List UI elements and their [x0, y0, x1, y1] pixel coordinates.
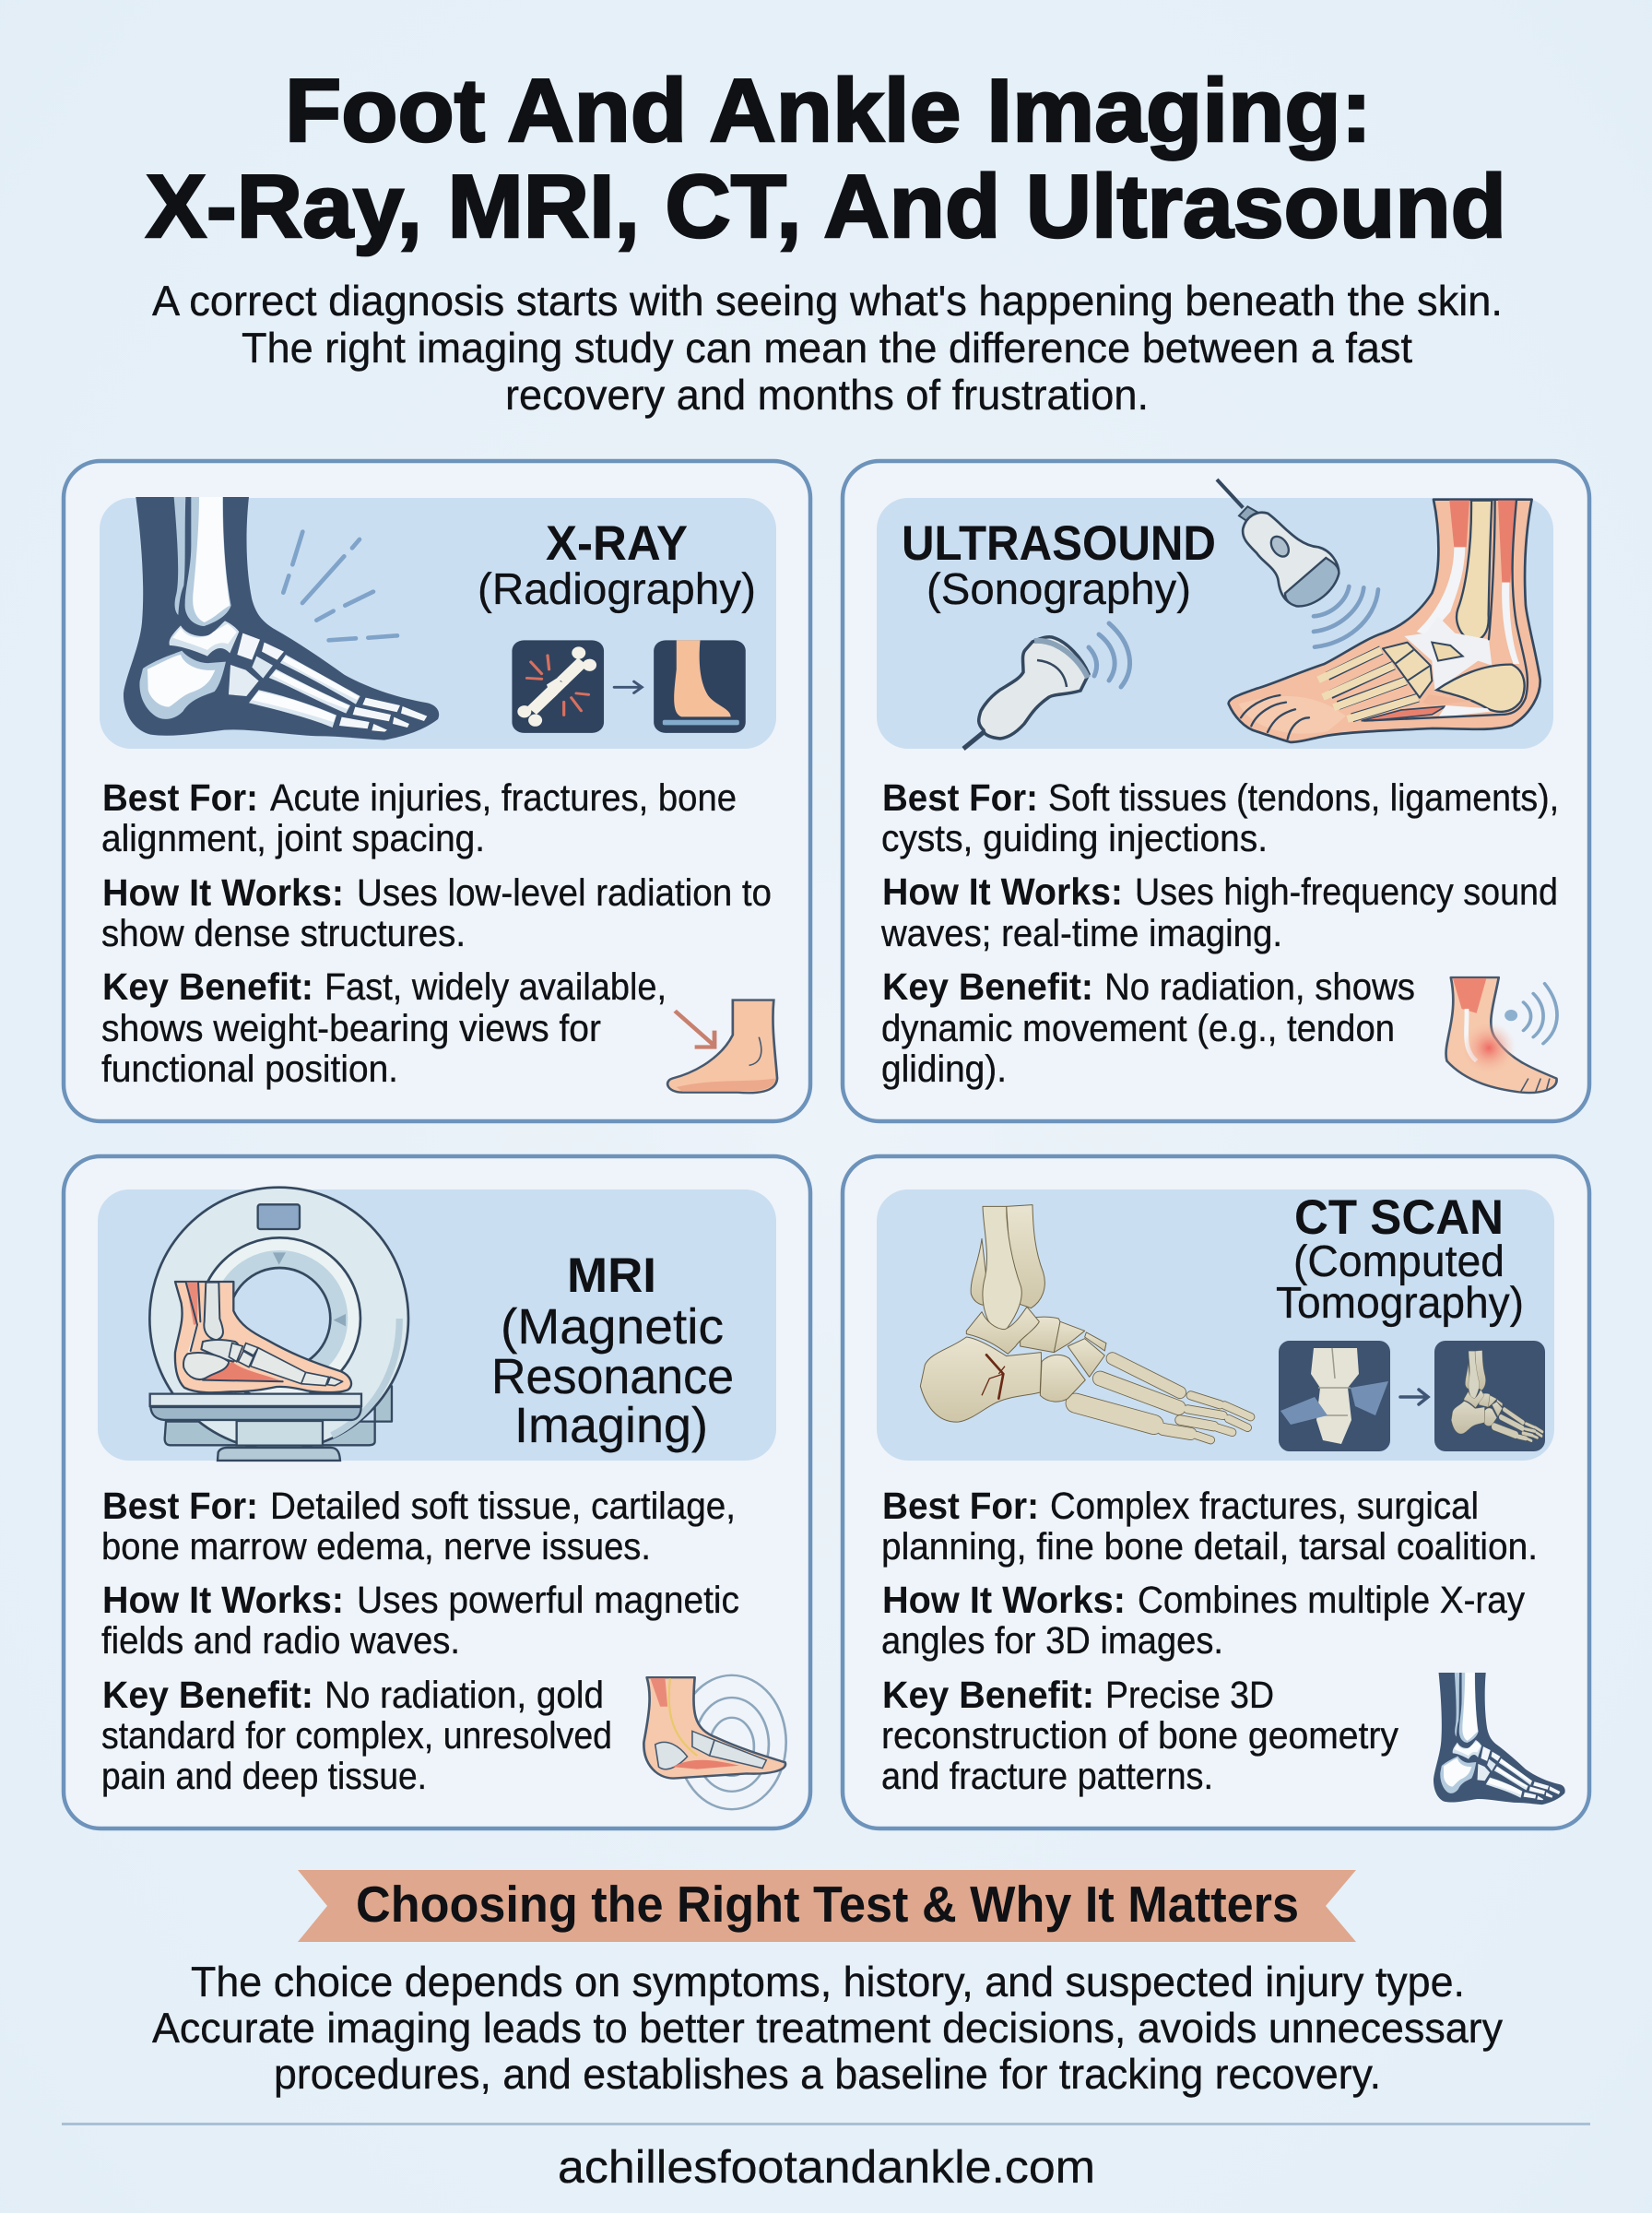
illustration: MRI scanner with foot [149, 1188, 408, 1461]
text: how it works: fields and radio waves. [101, 1619, 460, 1662]
text: best for [101, 1485, 736, 1568]
panel: Ultrasound [843, 461, 1589, 1121]
heading: CT Scan: (Computed [1293, 1237, 1504, 1286]
closing text: Accurate imaging leads to better treatment decisions, avoids unnecessary [152, 2004, 1503, 2052]
text: best for: bone marrow edema, nerve issues. [101, 1525, 651, 1568]
heading: Ultrasound: ULTRASOUND [902, 516, 1216, 571]
icon: inflamed ankle with sound waves [1446, 977, 1557, 1093]
title [146, 60, 1506, 256]
text: best for: Best For: [102, 1485, 258, 1527]
intro text: A correct diagnosis starts with seeing what's happening beneath the skin. [152, 277, 1503, 325]
text: best for: Best For: [102, 776, 258, 819]
icon: foot with arrow [667, 1000, 777, 1093]
intro text: The right imaging study can mean the difference between a fast [242, 324, 1412, 372]
intro text [152, 277, 1503, 419]
text: key benefit: Fast, widely available, [324, 965, 667, 1008]
icon: small x-ray foot [1434, 1673, 1565, 1805]
text: how it works: waves; real-time imaging. [880, 912, 1282, 954]
panel: CT Scan [843, 1156, 1589, 1828]
header band: MRI [98, 1189, 776, 1461]
illustration: ultrasound foot anatomy and upper probe [1217, 479, 1540, 742]
title: X-Ray, MRI, CT, And Ultrasound [146, 156, 1506, 256]
heading: MRI: Imaging) [514, 1398, 708, 1453]
text: key benefit: reconstruction of bone geometry [881, 1714, 1398, 1757]
text: best for: Complex fractures, surgical [1050, 1485, 1479, 1527]
text: how it works: Uses high-frequency sound [1135, 870, 1558, 913]
text: how it works: How It Works: [102, 1579, 344, 1621]
text: key benefit: Key Benefit: [882, 1674, 1094, 1716]
text: key benefit: Key Benefit: [882, 965, 1093, 1008]
text: best for: alignment, joint spacing. [101, 817, 485, 859]
title: Foot And Ankle Imaging: [285, 60, 1372, 160]
icon: CT slices to 3D reconstruction [1279, 1341, 1545, 1451]
text: key benefit: Key Benefit: [102, 965, 313, 1008]
heading: MRI: MRI [567, 1249, 656, 1303]
text: best for: Detailed soft tissue, cartilage, [270, 1485, 736, 1527]
text: how it works [101, 1579, 739, 1662]
illustration: fractured foot bones [920, 1205, 1251, 1440]
text: best for [881, 776, 1559, 859]
text: key benefit: Key Benefit: [102, 1674, 313, 1716]
heading: CT Scan [1276, 1190, 1524, 1328]
header band: X-Ray [100, 498, 776, 749]
text: best for [101, 776, 737, 859]
text: how it works: Uses powerful magnetic [357, 1579, 739, 1621]
text: how it works: Combines multiple X-ray [1138, 1579, 1525, 1621]
panel: X-Ray [64, 461, 810, 1121]
text: key benefit [101, 965, 667, 1090]
heading: CT Scan: CT SCAN [1294, 1190, 1504, 1245]
text: key benefit: dynamic movement (e.g., tendon [881, 1007, 1395, 1049]
illustration: lower ultrasound probe [963, 623, 1130, 749]
text: best for: Best For: [882, 1485, 1039, 1527]
icon: fractured bone and standing foot [512, 640, 746, 733]
text: how it works [881, 1579, 1525, 1662]
text: key benefit: Precise 3D [1105, 1674, 1274, 1716]
text: key benefit [881, 965, 1415, 1090]
heading: MRI [491, 1249, 734, 1453]
text: how it works: How It Works: [102, 871, 344, 914]
heading: MRI: Resonance [491, 1349, 734, 1404]
banner: choosing the right test: Choosing the Right Test & Why It Matters [356, 1876, 1299, 1933]
intro text: recovery and months of frustration. [505, 371, 1149, 419]
heading: X-Ray: (Radiography) [478, 565, 756, 614]
heading: X-Ray: X-RAY [546, 516, 688, 571]
text: key benefit [101, 1674, 612, 1797]
text: key benefit: shows weight-bearing views for [101, 1007, 601, 1049]
header band: CT Scan [877, 1189, 1554, 1461]
panel: MRI [64, 1156, 810, 1828]
text: best for: planning, fine bone detail, tarsal coalition. [881, 1525, 1538, 1568]
text: best for: cysts, guiding injections. [881, 817, 1268, 859]
text: key benefit: pain and deep tissue. [101, 1755, 427, 1797]
text: best for: Acute injuries, fractures, bone [270, 776, 737, 819]
text: key benefit [881, 1674, 1398, 1797]
heading: Ultrasound: (Sonography) [926, 565, 1191, 614]
heading: MRI: (Magnetic [501, 1299, 724, 1355]
icon: foot in magnetic field [643, 1675, 786, 1809]
closing text [152, 1958, 1503, 2098]
heading: X-Ray [478, 516, 756, 614]
text: key benefit: and fracture patterns. [881, 1755, 1213, 1797]
text: how it works: How It Works: [882, 1579, 1126, 1621]
heading: CT Scan: Tomography) [1276, 1279, 1524, 1328]
text: how it works: Uses low-level radiation to [357, 871, 772, 914]
text: how it works: angles for 3D images. [881, 1619, 1223, 1662]
text: key benefit: gliding). [881, 1047, 1007, 1090]
text: how it works: How It Works: [882, 870, 1123, 913]
text: how it works [101, 871, 772, 954]
illustration: x-ray foot [124, 497, 439, 740]
text: key benefit: No radiation, shows [1104, 965, 1415, 1008]
text: how it works: show dense structures. [101, 912, 466, 954]
text: best for [881, 1485, 1538, 1568]
text: key benefit: No radiation, gold [324, 1674, 604, 1716]
header band: Ultrasound [877, 498, 1553, 749]
text: how it works [880, 870, 1558, 954]
text: key benefit: standard for complex, unresolved [101, 1714, 612, 1757]
heading: Ultrasound [902, 516, 1216, 614]
text: best for: Soft tissues (tendons, ligaments), [1048, 776, 1559, 819]
closing text: procedures, and establishes a baseline for tracking recovery. [274, 2050, 1381, 2098]
closing text: The choice depends on symptoms, history, and suspected injury type. [191, 1958, 1465, 2006]
website url: achillesfootandankle.com [558, 2141, 1095, 2193]
text: best for: Best For: [882, 776, 1038, 819]
text: key benefit: functional position. [101, 1047, 398, 1090]
